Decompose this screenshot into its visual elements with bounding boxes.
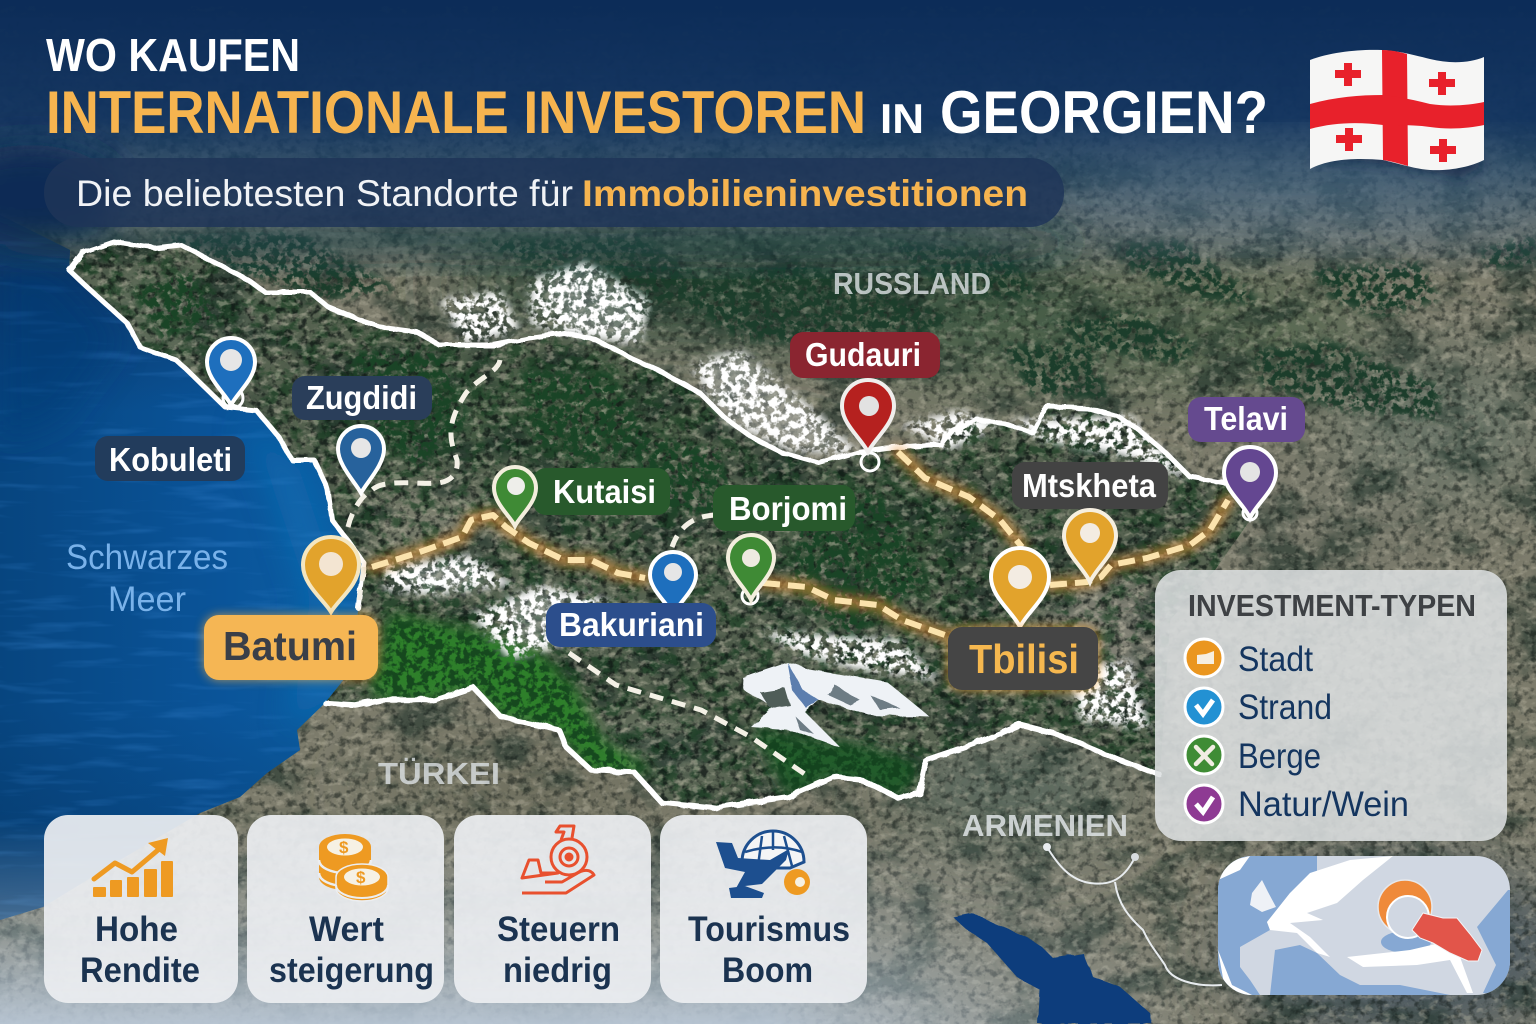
region label: Schwarzes Meer	[66, 538, 228, 619]
orange routes	[372, 452, 1228, 635]
subtitle pill	[44, 158, 1064, 227]
header: title	[46, 29, 1268, 146]
label: Tbilisi	[948, 627, 1098, 690]
snow fields	[384, 262, 1190, 730]
Georgia terrain	[74, 244, 1249, 806]
card: Wertsteigerung	[247, 815, 444, 1003]
header: title: INTERNATIONALE INVESTOREN	[46, 79, 866, 146]
card: Hohe Rendite: Hohe	[95, 910, 178, 949]
legend item: Strand: Strand	[1238, 688, 1332, 727]
label: Gudauri	[790, 332, 940, 378]
label: Telavi: Telavi	[1204, 400, 1288, 437]
label: Batumi: Batumi	[223, 623, 357, 669]
card: Steuern niedrig: niedrig	[503, 951, 612, 990]
region label: Türkei: TÜRKEI	[378, 756, 500, 791]
forests outside Georgia	[150, 232, 1536, 420]
label: Tbilisi: Tbilisi	[969, 636, 1079, 682]
panel: legend investment types	[1155, 570, 1507, 841]
icon: coins: $	[339, 838, 349, 857]
legend item: Natur/Wein: Natur/Wein	[1238, 785, 1409, 824]
sea	[0, 222, 362, 920]
bottom haze	[0, 834, 1191, 1024]
legend item: Stadt	[1185, 639, 1313, 679]
legend item: Strand	[1185, 688, 1332, 727]
label: Telavi	[1188, 397, 1305, 442]
region label: Schwarzes Meer: Meer	[108, 580, 186, 619]
icon: coins: $	[356, 868, 366, 887]
icon: coins	[319, 834, 388, 901]
legend item: Berge: Berge	[1238, 737, 1321, 776]
white dashed routes	[348, 360, 809, 777]
Lake Sevan	[953, 913, 1152, 1024]
pin: Gudauri	[842, 380, 894, 471]
region label: Armenien: ARMENIEN	[962, 808, 1128, 843]
inset: Europe locator map	[1218, 856, 1510, 995]
pin: Bakuriani	[650, 552, 696, 615]
pin: Mtskheta	[1064, 510, 1116, 582]
card: Steuern niedrig	[454, 815, 651, 1003]
pin: Telavi	[1224, 447, 1276, 520]
card: Wertsteigerung: Wert	[309, 910, 384, 949]
snow peak	[742, 662, 930, 748]
legend item: Stadt: Stadt	[1238, 640, 1313, 679]
header: title: WO KAUFEN	[46, 29, 300, 81]
label: Bakuriani: Bakuriani	[559, 606, 704, 643]
card: Tourismus Boom: Boom	[722, 951, 813, 990]
icon: plane and globe	[716, 831, 810, 898]
card: Hohe Rendite: Rendite	[80, 951, 200, 990]
legend heading: INVESTMENT-TYPEN	[1188, 588, 1476, 623]
card: Tourismus Boom: Tourismus	[688, 910, 850, 949]
forests in Georgia	[130, 270, 930, 640]
label: Batumi	[204, 615, 378, 680]
icon: hand with money bag	[522, 826, 594, 893]
pin: Batumi	[303, 537, 359, 612]
label: Kutaisi: Kutaisi	[553, 473, 656, 510]
label: Kobuleti: Kobuleti	[109, 441, 232, 478]
card: Tourismus Boom	[660, 815, 867, 1003]
pin: Tbilisi	[991, 548, 1049, 627]
label: Borjomi: Borjomi	[729, 490, 847, 527]
header: title: GEORGIEN?	[940, 79, 1268, 146]
label: Gudauri: Gudauri	[805, 336, 921, 373]
pin: Borjomi	[728, 535, 774, 604]
legend item: Berge	[1185, 736, 1321, 776]
pin: Kutaisi	[494, 467, 536, 526]
card: Hohe Rendite	[44, 815, 238, 1003]
subtitle pill: Die beliebtesten Standorte für	[76, 173, 573, 214]
card: Steuern niedrig: Steuern	[497, 910, 620, 949]
label: Mtskheta: Mtskheta	[1022, 467, 1157, 504]
icon: rising chart	[93, 838, 173, 897]
header: title: IN	[880, 95, 924, 142]
label: Zugdidi: Zugdidi	[306, 379, 417, 416]
Georgia border	[69, 242, 1226, 808]
subtitle pill: Immobilieninvestitionen	[582, 173, 1028, 214]
region label: Schwarzes Meer: Schwarzes	[66, 538, 228, 577]
icon: Georgian flag	[1310, 50, 1484, 178]
pin: Kobuleti	[207, 338, 255, 408]
region label: Russland: RUSSLAND	[833, 266, 991, 301]
label: Kutaisi	[533, 468, 670, 515]
sky and distant mountains	[0, 0, 1536, 280]
card: Wertsteigerung: steigerung	[269, 951, 434, 990]
pin: Zugdidi	[338, 426, 384, 493]
thin route to inset	[1043, 843, 1222, 985]
